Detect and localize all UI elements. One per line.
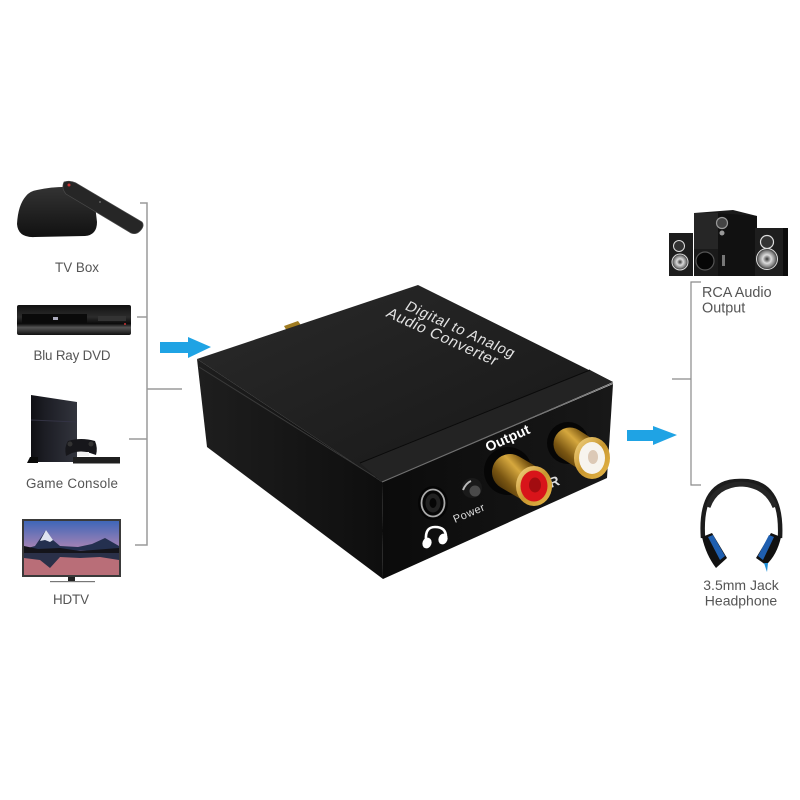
rear gold connector (284, 321, 303, 333)
label: RCA Audio Output: Output (702, 300, 745, 316)
label: RCA Audio Output: RCA Audio (702, 285, 772, 301)
label: Game Console: Game Console (26, 476, 118, 491)
icon: TV box with remote (17, 181, 143, 237)
icon: Blu Ray DVD player (17, 305, 131, 335)
icon: HDTV (22, 519, 121, 582)
device: converter box (197, 285, 613, 579)
left bracket connector (129, 203, 182, 545)
output label: Output (483, 421, 532, 455)
label: 3.5mm Jack Headphone: Headphone (705, 592, 777, 608)
icon: speakers (669, 210, 788, 276)
headphone icon (421, 527, 449, 550)
red RCA socket (484, 447, 552, 506)
label: Blu Ray DVD: Blu Ray DVD (34, 348, 111, 363)
icon: headphones (702, 481, 781, 572)
top printed text: Digital to Analog (402, 299, 518, 361)
power label: Power (451, 502, 487, 526)
front face (382, 384, 613, 579)
arrow: output (627, 426, 677, 445)
R label: R (547, 472, 562, 491)
arrow: input (160, 337, 211, 358)
top face (197, 285, 613, 482)
left side face (197, 359, 383, 579)
icon: game console (27, 395, 120, 464)
headphone jack (418, 486, 448, 520)
right bracket connector (672, 282, 701, 485)
white RCA socket (547, 422, 610, 479)
label: TV Box: TV Box (55, 260, 99, 275)
power LED (462, 478, 482, 498)
device: converter box: Audio Converter (383, 305, 501, 369)
label: 3.5mm Jack Headphone: 3.5mm Jack (703, 577, 779, 593)
label: HDTV: HDTV (53, 592, 89, 607)
front lid strip (360, 370, 613, 482)
